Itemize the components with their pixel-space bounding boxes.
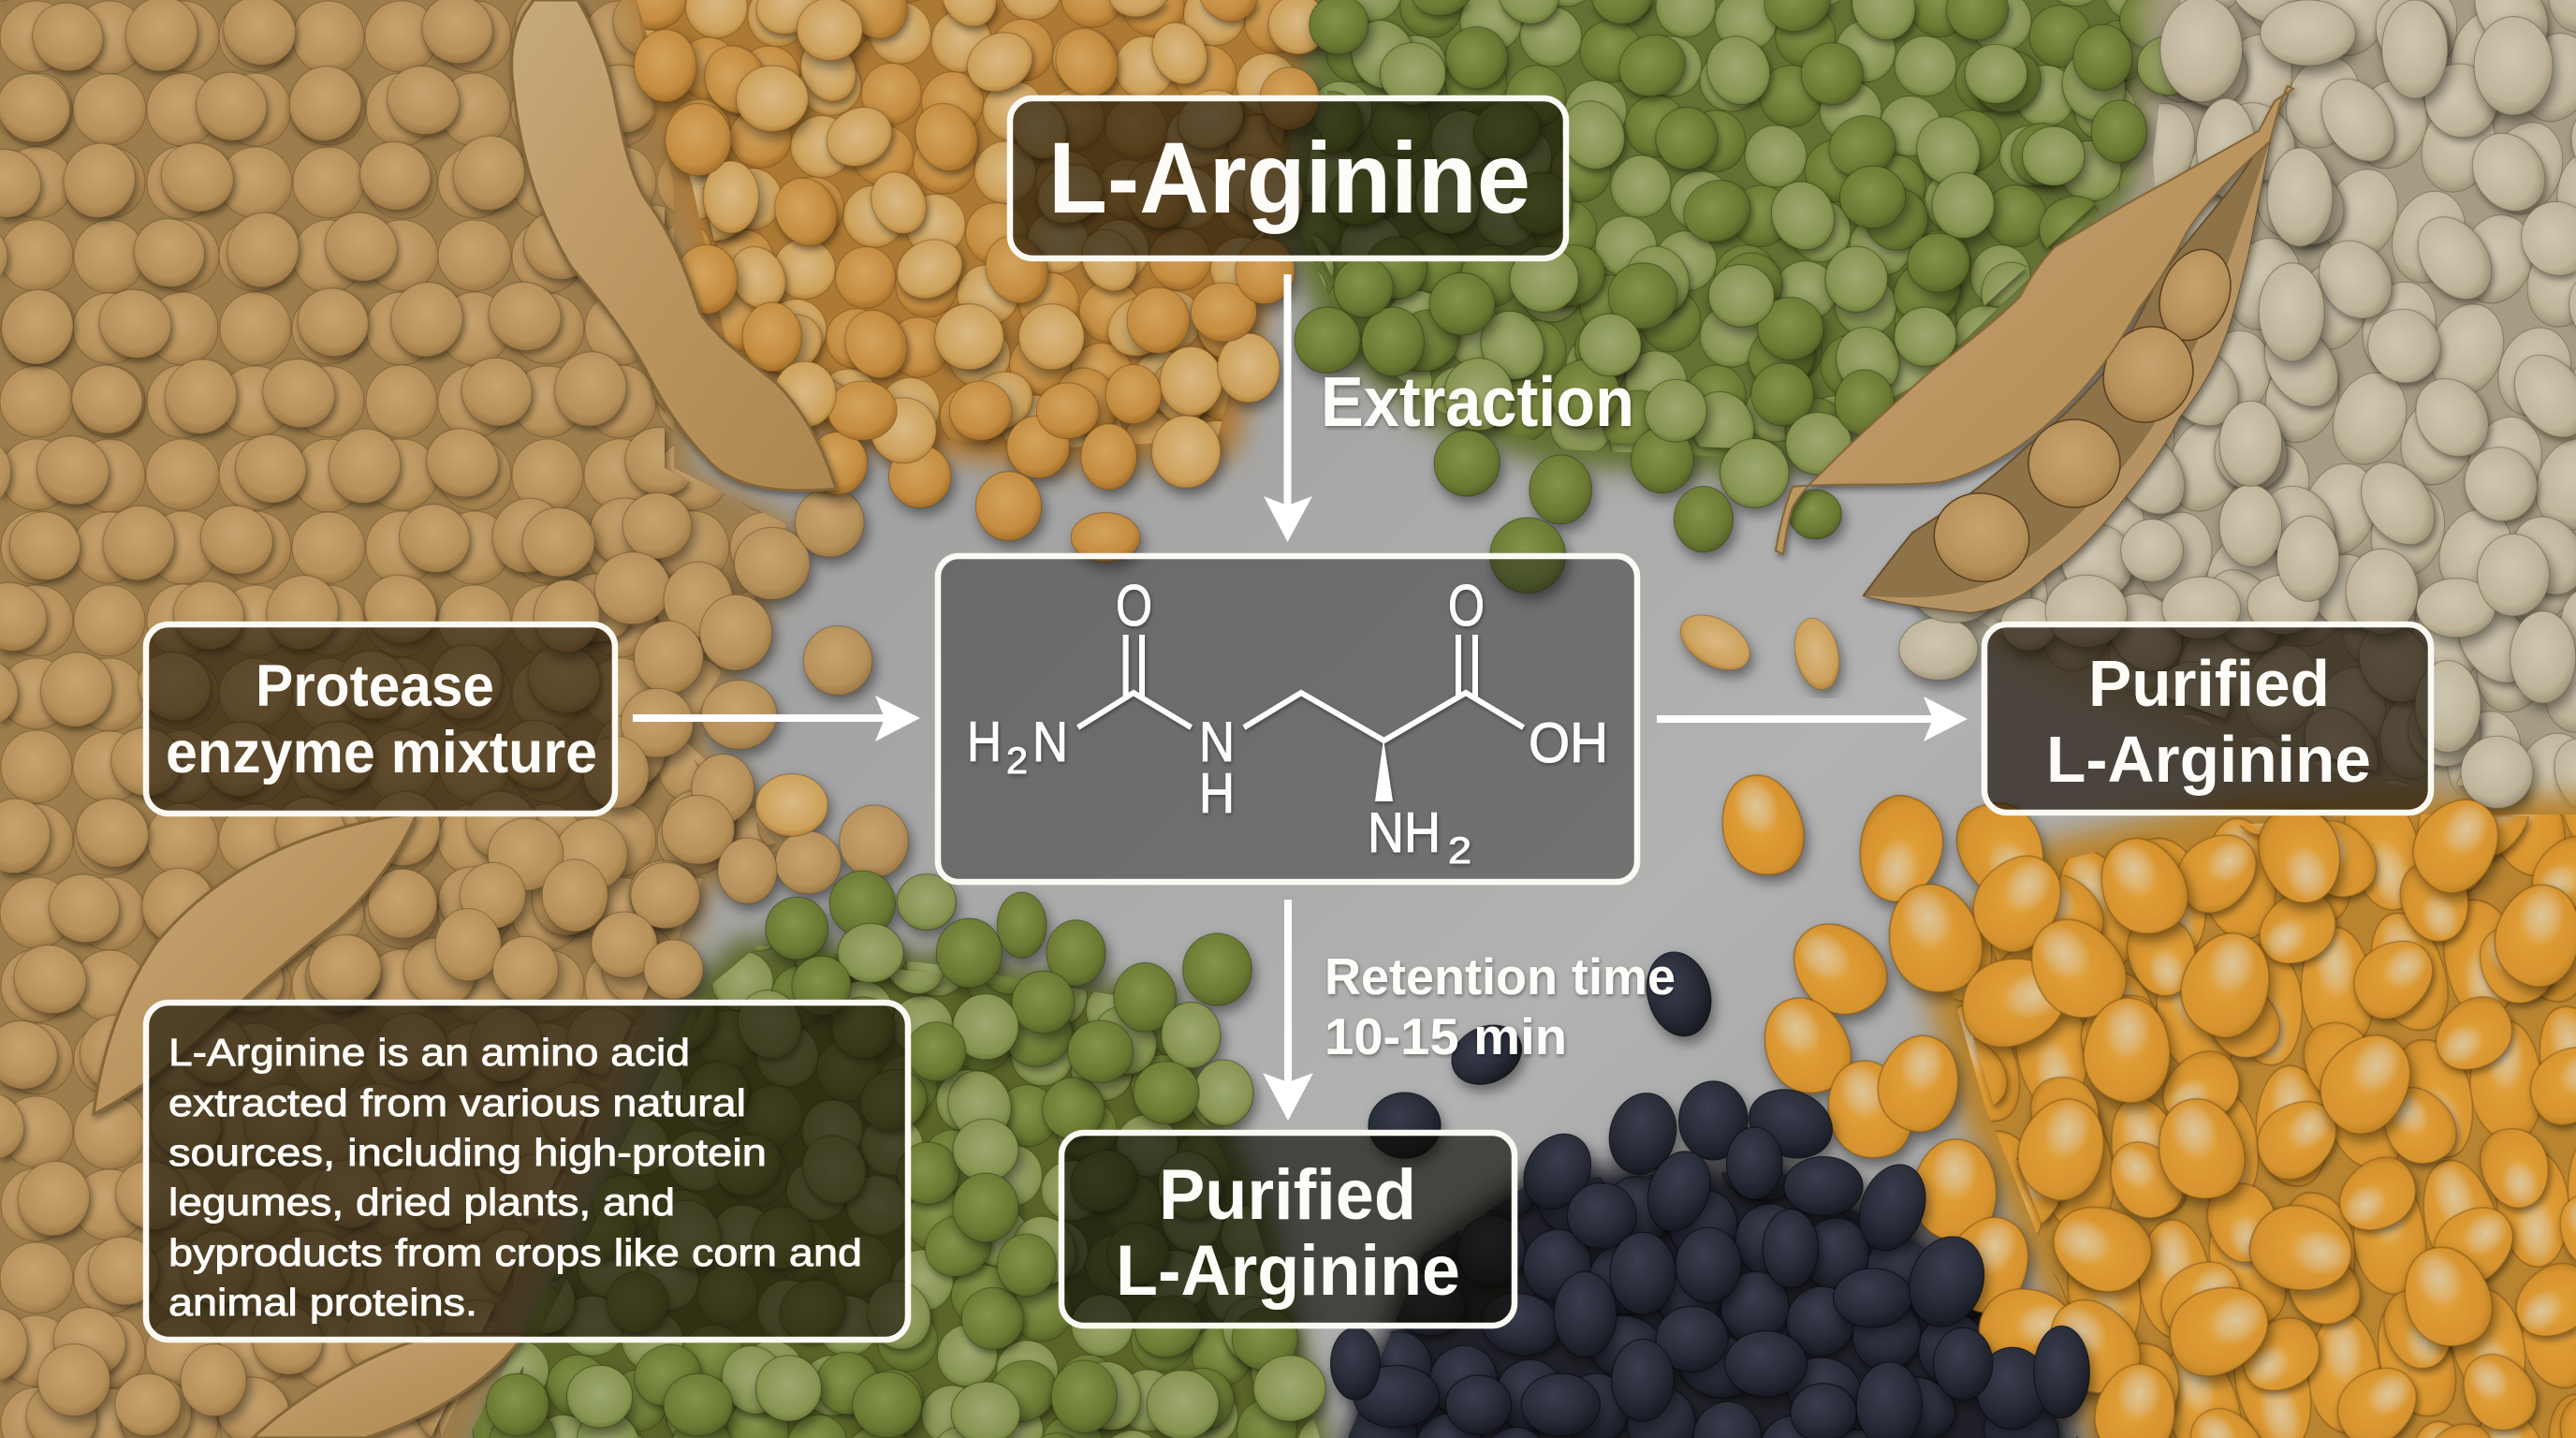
panel: green split peas upper field bbox=[1282, 0, 2218, 477]
panel: purified L-Arginine right: L-Arginine bbox=[2046, 723, 2371, 796]
chemical structure of L-arginine: H bbox=[1199, 762, 1235, 825]
panel: black beans field bbox=[1329, 1161, 2087, 1438]
chemical structure of L-arginine bbox=[967, 574, 1608, 872]
panel: description text: legumes, dried plants, and bbox=[168, 1181, 675, 1224]
chemical structure of L-arginine: O bbox=[1448, 574, 1485, 638]
black bean edge beans bbox=[1331, 945, 2089, 1438]
title box: L-Arginine bbox=[1010, 98, 1566, 258]
chemical structure of L-arginine: OH bbox=[1529, 712, 1608, 774]
panel: white beans field bbox=[1947, 0, 2576, 843]
panel: molecule structure box bbox=[938, 556, 1637, 882]
panel: soybeans field bbox=[0, 0, 805, 1438]
chemical structure of L-arginine: 2 bbox=[1448, 830, 1471, 872]
label: retention time bbox=[1325, 947, 1676, 1065]
chemical structure of L-arginine: H bbox=[967, 711, 1002, 773]
panel: description text: L-Arginine is an amino acid bbox=[168, 1031, 690, 1074]
label: retention time: Retention time bbox=[1325, 947, 1676, 1005]
label: Extraction: Extraction bbox=[1321, 362, 1634, 441]
chemical structure of L-arginine: O bbox=[1116, 574, 1152, 638]
chemical structure of L-arginine: N bbox=[1199, 711, 1235, 773]
panel: description text: byproducts from crops like corn and bbox=[168, 1231, 862, 1274]
chemical structure of L-arginine: 2 bbox=[1006, 741, 1028, 782]
chemical structure of L-arginine: N bbox=[1032, 711, 1068, 773]
panel: purified L-Arginine bottom: L-Arginine bbox=[1116, 1231, 1460, 1311]
arrow: retention down bbox=[1263, 900, 1313, 1121]
panel: purified L-Arginine right bbox=[1984, 624, 2431, 813]
panel: orange split peas field bbox=[618, 0, 1329, 468]
green split pea lower edge pieces bbox=[486, 871, 1325, 1438]
panel: purified L-Arginine bottom: Purified bbox=[1159, 1155, 1416, 1235]
arrow: protease to molecule bbox=[633, 696, 920, 741]
label: retention time: 10-15 min bbox=[1325, 1007, 1567, 1065]
chemical structure of L-arginine: NH bbox=[1368, 801, 1441, 864]
white bean edge beans bbox=[1899, 0, 2576, 808]
green split pea upper edge pieces bbox=[1295, 0, 2200, 594]
panel: purified L-Arginine bottom bbox=[1061, 1133, 1515, 1326]
corn kernels edge bbox=[1708, 765, 2576, 1438]
arrow: molecule to purified right bbox=[1657, 697, 1968, 741]
icon: soybean pod lower left bbox=[94, 814, 524, 1438]
panel: description text bbox=[146, 1003, 908, 1340]
panel: green split peas lower field bbox=[459, 936, 1339, 1438]
icon: soybean pod top left bbox=[512, 0, 836, 491]
panel: description text: extracted from various natural bbox=[168, 1081, 746, 1124]
panel: protease enzyme mixture: Protease bbox=[256, 653, 494, 719]
panel: protease enzyme mixture: enzyme mixture bbox=[166, 720, 597, 785]
panel: protease enzyme mixture bbox=[146, 624, 615, 814]
panel: corn field bbox=[1919, 796, 2576, 1438]
icon: open soybean pod right bbox=[1776, 86, 2293, 612]
stray peanut halves bbox=[1671, 604, 1845, 694]
soybean edge beans bbox=[37, 488, 909, 1436]
title box: L-Arginine: L-Arginine bbox=[1048, 121, 1530, 234]
orange split pea edge pieces bbox=[634, 0, 1327, 562]
panel: description text: animal proteins. bbox=[168, 1281, 477, 1324]
panel: description text: sources, including high-protein bbox=[168, 1131, 767, 1174]
panel: purified L-Arginine right: Purified bbox=[2088, 647, 2330, 720]
arrow: extraction down bbox=[1264, 274, 1312, 542]
